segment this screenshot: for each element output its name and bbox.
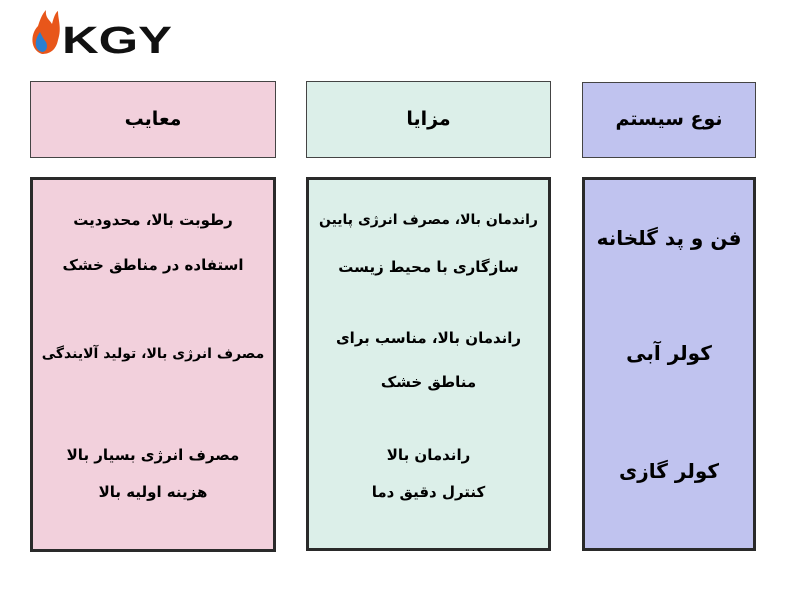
panel: disadvantages: رطوبت بالا، محدودیت [73,211,233,229]
panel: advantages [306,177,551,551]
panel: advantages: راندمان بالا، مناسب برای [336,329,521,347]
panel: system types [582,177,756,551]
panel: disadvantages [30,177,276,552]
header: advantages: مزایا [406,108,451,130]
panel: disadvantages: استفاده در مناطق خشک [62,256,244,274]
panel: advantages: راندمان بالا [387,446,470,464]
header: system type: نوع سیستم [615,108,723,130]
panel: advantages: راندمان بالا، مصرف انرژی پایین [319,212,538,228]
panel: disadvantages: هزینه اولیه بالا [99,483,207,501]
panel: advantages: کنترل دقیق دما [372,483,485,501]
header: disadvantages: معایب [125,108,181,130]
panel: disadvantages: مصرف انرژی بالا، تولید آلایندگی [42,346,264,362]
header: system type [582,82,756,158]
panel: system types: فن و پد گلخانه [597,226,741,250]
icon: flame [32,10,60,54]
panel: advantages: مناطق خشک [381,373,476,391]
panel: system types: کولر آبی [626,341,712,365]
panel: advantages: سازگاری با محیط زیست [338,258,519,276]
logo [32,10,172,58]
panel: system types: کولر گازی [619,459,719,483]
panel: disadvantages: مصرف انرژی بسیار بالا [67,446,239,464]
header: disadvantages [30,81,276,158]
header: advantages [306,81,551,158]
